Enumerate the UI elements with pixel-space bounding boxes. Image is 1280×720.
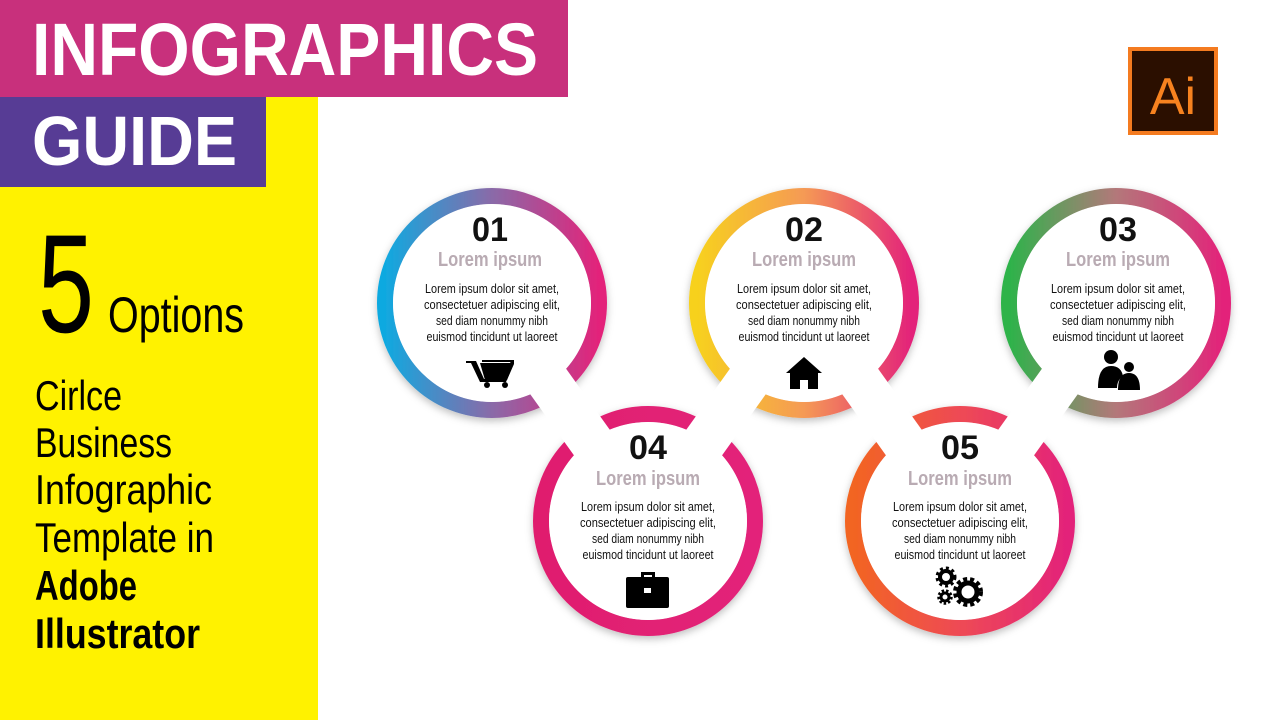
- side description text: Illustrator: [35, 610, 200, 657]
- panel: option 03: Lorem ipsum: [1066, 249, 1170, 271]
- big number 5 Options: Options: [108, 287, 244, 343]
- big number 5 Options: [38, 205, 244, 362]
- panel: option 05: sed diam nonummy nibh: [904, 531, 1016, 546]
- panel: option 05: consectetuer adipiscing elit,: [892, 515, 1028, 530]
- panel: option 01: sed diam nonummy nibh: [436, 313, 548, 328]
- icon: Adobe Illustrator logo: [1130, 49, 1216, 133]
- panel: option 03: consectetuer adipiscing elit,: [1050, 297, 1186, 312]
- panel: option 03: 03: [1099, 211, 1137, 249]
- panel: option 04: Lorem ipsum dolor sit amet,: [581, 499, 715, 514]
- panel: option 05: [892, 429, 1028, 605]
- side description text: Adobe: [35, 562, 137, 609]
- panel: option 04: [580, 429, 716, 608]
- panel: option 05: euismod tincidunt ut laoreet: [894, 547, 1026, 562]
- side description text: Template in: [35, 514, 214, 561]
- panel: option 02: Lorem ipsum: [752, 249, 856, 271]
- panel: option 04: euismod tincidunt ut laoreet: [582, 547, 714, 562]
- panel: option 04: sed diam nonummy nibh: [592, 531, 704, 546]
- connectors: [492, 303, 1116, 521]
- panel: option 04: 04: [629, 429, 667, 467]
- panel: option 02: Lorem ipsum dolor sit amet,: [737, 281, 871, 296]
- icon: Adobe Illustrator logo: Ai: [1150, 68, 1196, 126]
- panel: option 04: consectetuer adipiscing elit,: [580, 515, 716, 530]
- panel: option 04: Lorem ipsum: [596, 468, 700, 490]
- panel: option 01: [424, 211, 560, 388]
- big number 5 Options: 5: [38, 205, 94, 362]
- panel: option 02: 02: [785, 211, 823, 249]
- panel: option 01: euismod tincidunt ut laoreet: [426, 329, 558, 344]
- panel: option 03: euismod tincidunt ut laoreet: [1052, 329, 1184, 344]
- icon: shopping cart: [466, 360, 514, 388]
- yellow side panel: [0, 97, 318, 720]
- side description text: Business: [35, 419, 172, 466]
- title banner: INFOGRAPHICS: INFOGRAPHICS: [32, 8, 538, 91]
- panel: option 03: [1050, 211, 1186, 390]
- panel: option 03: Lorem ipsum dolor sit amet,: [1051, 281, 1185, 296]
- panel: option 02: [736, 211, 872, 389]
- panel: option 01: Lorem ipsum: [438, 249, 542, 271]
- panel: option 03: sed diam nonummy nibh: [1062, 313, 1174, 328]
- side description text: [35, 372, 214, 657]
- icon: house: [786, 357, 822, 389]
- side description text: Cirlce: [35, 372, 122, 419]
- icon: people: [1098, 350, 1140, 390]
- rings: [385, 196, 1223, 628]
- panel: option 02: euismod tincidunt ut laoreet: [738, 329, 870, 344]
- side description text: Infographic: [35, 466, 212, 513]
- panel: option 01: Lorem ipsum dolor sit amet,: [425, 281, 559, 296]
- icon: gears: [937, 568, 981, 605]
- subtitle banner: GUIDE: GUIDE: [32, 102, 237, 180]
- panel: option 01: 01: [472, 211, 508, 249]
- panel: option 05: Lorem ipsum: [908, 468, 1012, 490]
- icon: briefcase: [626, 572, 669, 608]
- panel: option 02: sed diam nonummy nibh: [748, 313, 860, 328]
- panel: option 01: consectetuer adipiscing elit,: [424, 297, 560, 312]
- panel: option 05: 05: [941, 429, 979, 467]
- panel: option 05: Lorem ipsum dolor sit amet,: [893, 499, 1027, 514]
- panel: option 02: consectetuer adipiscing elit,: [736, 297, 872, 312]
